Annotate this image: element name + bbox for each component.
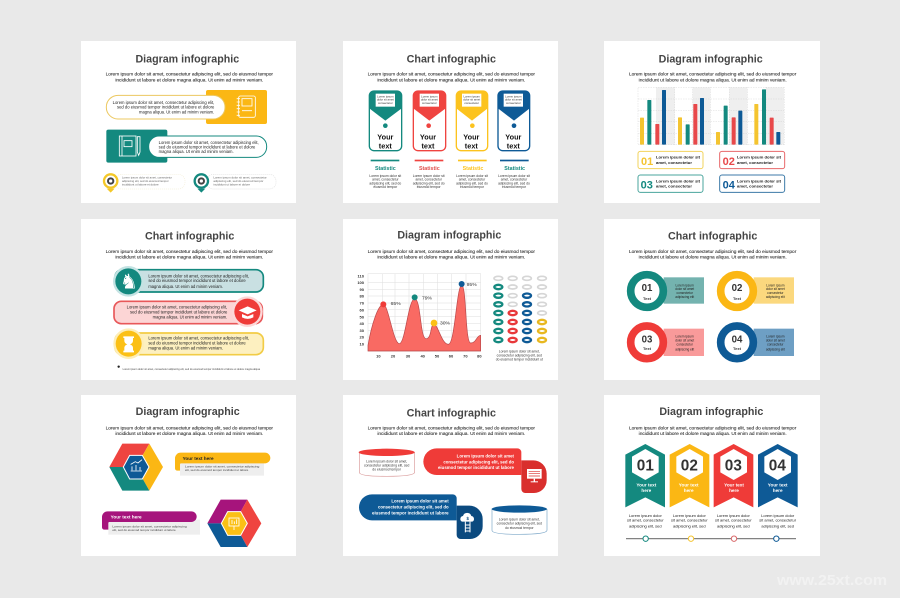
ring 03: dolor sit amet	[675, 338, 694, 342]
legend 03: 03	[641, 179, 653, 191]
ring 03: 03	[642, 334, 653, 345]
ring 04: consectetur	[767, 342, 783, 346]
area chart: 40	[420, 354, 426, 359]
banner 04: Lorem ipsum dolor	[761, 513, 795, 518]
callout: blue cloud: eiusmod tempor incididunt ut labore	[372, 510, 449, 515]
banner 01: 01	[637, 457, 654, 474]
legend 04: 04	[723, 179, 736, 191]
callout: red monitor: consectetur adipiscing elit, sed do	[443, 459, 514, 464]
legend 01: amet, consectetur	[656, 160, 692, 165]
hexagon: presentation	[207, 500, 261, 547]
banner 03: Lorem ipsum dolor	[717, 513, 751, 518]
pin: teal gear: adipiscing elit, sed do eiusmod tempor	[213, 179, 263, 183]
pin: yellow gear: incididunt ut labore et dolore	[122, 182, 159, 186]
intro text	[629, 426, 797, 437]
banner 02: 02	[681, 457, 698, 474]
card: yellow statistic: consectetur	[464, 101, 479, 105]
intro text: incididunt ut labore et dolore magna aliqua. Ut enim ad minim veniam.	[377, 431, 525, 437]
card: red statistic: amet, consectetur	[415, 178, 443, 182]
banner 02: here	[684, 488, 694, 493]
row: red education	[114, 296, 263, 327]
banner 01: Your text	[636, 482, 657, 487]
card: teal statistic	[369, 91, 402, 189]
callout: red monitor: eiusmod tempor incididunt ut labore	[438, 465, 515, 470]
heading: Diagram infographic	[659, 406, 763, 418]
area chart: 70	[360, 301, 365, 306]
ring 04	[721, 326, 794, 359]
callout: blue cloud	[359, 494, 483, 539]
area chart	[357, 273, 482, 359]
footnote: Lorem ipsum dolor sit amet, consectetur adipiscing elit, sed do eiusmod tempor incididunt ut labore et dolore magna aliqua	[123, 367, 260, 371]
heading: Chart infographic	[145, 231, 234, 243]
callout: purple text: Lorem ipsum dolor sit amet, consectetur adipiscing	[112, 525, 187, 529]
bar chart	[638, 87, 785, 145]
callout: teal notebook: sed do eiusmod tempor incididunt ut labore et dolore	[159, 145, 256, 150]
cylinder: red	[359, 449, 415, 476]
callout: yellow notebook: sed do eiusmod tempor incididunt ut labore et dolore	[117, 105, 215, 110]
legend 03	[638, 175, 703, 192]
legend 02: Lorem ipsum dolor sit	[737, 155, 782, 160]
row: yellow hourglass: Lorem ipsum dolor sit amet, consectetur adipiscing elit,	[148, 336, 249, 341]
ring 02	[721, 275, 794, 307]
ring 04: Text	[733, 346, 742, 351]
banner 02: sit amet, consectetur	[671, 518, 708, 523]
intro text: Lorem ipsum dolor sit amet, consectetur adipiscing elit, sed do eiusmod tempor	[629, 72, 797, 78]
ring 01: adipiscing elit	[675, 295, 694, 299]
legend 01: Lorem ipsum dolor sit	[656, 155, 701, 160]
legend 02: 02	[723, 156, 735, 168]
ring 04: Lorem ipsum	[766, 335, 785, 339]
pin: teal gear	[195, 174, 276, 193]
card: blue statistic: Statistic	[504, 166, 525, 172]
row: yellow hourglass	[113, 328, 263, 359]
card: teal statistic: adipiscing elit, sed do	[369, 181, 401, 185]
pin: yellow gear	[104, 174, 185, 193]
card: blue statistic: eiusmod tempor	[502, 185, 527, 189]
heading: Diagram infographic	[659, 54, 763, 66]
ring 02: Text	[733, 296, 742, 301]
ring 02: dolor sit amet	[766, 287, 785, 291]
card: red statistic: dolor sit amet	[421, 98, 438, 102]
row: red education: Lorem ipsum dolor sit amet, consectetur adipiscing elit,	[127, 305, 227, 310]
ring 01: 01	[642, 283, 653, 294]
panel: diagram infographic area chart	[343, 219, 558, 380]
legend 01: 01	[641, 156, 653, 168]
pictogram note: consectetur adipiscing elit, sed	[497, 354, 542, 358]
legend 02: amet, consectetur	[737, 160, 773, 165]
card: red statistic	[413, 91, 446, 189]
ring 03	[631, 326, 704, 359]
pin: teal gear: incididunt ut labore et dolore	[213, 182, 250, 186]
area chart: 20	[360, 335, 365, 340]
banner 03: 03	[725, 457, 742, 474]
area chart: 90	[360, 287, 365, 292]
intro text: incididunt ut labore et dolore magna aliqua. Ut enim ad minim veniam.	[377, 77, 525, 83]
intro text: Lorem ipsum dolor sit amet, consectetur adipiscing elit, sed do eiusmod tempor	[629, 426, 797, 432]
heading: Diagram infographic	[135, 54, 239, 66]
panel: diagram infographic hexagons	[81, 395, 296, 556]
panel: diagram infographic bar chart	[604, 41, 820, 203]
callout: red monitor	[423, 448, 547, 493]
card: red statistic: Lorem ipsum dolor sit	[413, 174, 445, 178]
card: yellow statistic: Lorem ipsum	[463, 94, 480, 98]
callout: blue cloud: consectetur adipiscing elit, sed do	[378, 505, 449, 510]
row: yellow hourglass: magna aliqua. Ut enim ad minim veniam.	[148, 346, 223, 351]
callout: yellow text: elit, sed do eiusmod tempor incididunt ut labore	[185, 468, 249, 472]
banner 03: sit amet, consectetur	[715, 518, 752, 523]
card: red statistic: Your	[420, 133, 436, 142]
cylinder: blue: do eiusmod tempor	[505, 526, 534, 530]
ring 04: 04	[732, 334, 743, 345]
panel: chart infographic rows	[81, 219, 296, 380]
area chart: 70	[463, 354, 468, 359]
area chart: 79%	[422, 295, 433, 301]
ring 02: 02	[732, 283, 742, 294]
card: blue statistic: consectetur	[506, 101, 521, 105]
area chart: 30	[360, 328, 365, 333]
intro text: Lorem ipsum dolor sit amet, consectetur adipiscing elit, sed do eiusmod tempor	[106, 249, 273, 255]
legend 01	[638, 151, 703, 169]
banner 02: adipiscing elit, sed	[673, 523, 706, 528]
intro text: Lorem ipsum dolor sit amet, consectetur adipiscing elit, sed do eiusmod tempor	[106, 72, 273, 78]
callout: yellow text	[175, 453, 270, 476]
cylinder: blue: Lorem ipsum dolor sit amet,	[499, 518, 540, 522]
hexagon: chart	[109, 444, 163, 491]
ring 02: consectetur	[767, 291, 783, 295]
callout: purple text	[102, 511, 200, 535]
intro text	[368, 249, 535, 260]
intro text	[368, 72, 535, 83]
area chart: 100	[357, 280, 365, 285]
callout: red monitor: Lorem ipsum dolor sit amet	[457, 454, 515, 459]
banner 02	[670, 444, 709, 528]
card: teal statistic: Lorem ipsum	[377, 94, 394, 98]
banner 02: Lorem ipsum dolor	[673, 513, 707, 518]
watermark: www.25xt.com	[776, 572, 887, 589]
ring 03: Lorem ipsum	[676, 335, 694, 339]
intro text	[106, 426, 273, 437]
callout: yellow notebook: magna aliqua. Ut enim ad minim veniam.	[139, 110, 214, 115]
legend 03: Lorem ipsum dolor sit	[656, 179, 701, 184]
card: blue statistic: Lorem ipsum dolor sit	[498, 174, 530, 178]
intro text: incididunt ut labore et dolore magna aliqua. Ut enim ad minim veniam.	[639, 431, 787, 437]
banner 01: adipiscing elit, sed	[629, 523, 662, 528]
banner 01: here	[641, 488, 652, 493]
ring 01	[631, 275, 704, 307]
ring 04: adipiscing elit	[766, 347, 785, 351]
intro text: incididunt ut labore et dolore magna aliqua. Ut enim ad minim veniam.	[639, 77, 787, 83]
banner 03: Your text	[724, 482, 744, 487]
intro text	[106, 249, 273, 260]
card: red statistic: Lorem ipsum	[421, 94, 438, 98]
intro text	[106, 72, 273, 83]
intro text: Lorem ipsum dolor sit amet, consectetur adipiscing elit, sed do eiusmod tempor	[629, 249, 797, 255]
card: blue statistic: dolor sit amet	[505, 98, 522, 102]
panel: diagram infographic notebooks	[81, 41, 296, 203]
heading: Chart infographic	[407, 408, 496, 420]
pictogram note: Lorem ipsum dolor sit amet,	[499, 350, 540, 354]
area chart: 30	[406, 354, 411, 359]
card: teal statistic: eiusmod tempor	[373, 185, 398, 189]
banner 04	[758, 444, 798, 528]
card: teal statistic: text	[379, 141, 392, 150]
pin: yellow gear: adipiscing elit, sed do eiusmod tempor	[122, 179, 169, 183]
banner 04: 04	[769, 457, 786, 474]
card: red statistic: eiusmod tempor	[417, 185, 441, 189]
pictogram note: do eiusmod tempor incididunt ut	[496, 358, 543, 362]
ring 01: consectetur	[677, 291, 693, 295]
callout: yellow text: Your text here	[183, 456, 214, 461]
intro text: Lorem ipsum dolor sit amet, consectetur adipiscing elit, sed do eiusmod tempor	[106, 426, 273, 432]
banner 03: here	[729, 488, 739, 493]
callout: purple text: Your text here	[111, 515, 142, 520]
callout: teal notebook: magna aliqua. Ut enim ad minim veniam.	[159, 149, 234, 154]
row: teal strategy	[113, 266, 263, 297]
panel: chart infographic rings	[604, 219, 820, 380]
cylinder: red: Lorem ipsum dolor sit amet,	[366, 460, 407, 464]
cylinder: blue	[492, 505, 547, 534]
banner 02: Your text	[679, 482, 699, 487]
intro text	[629, 72, 797, 83]
ring 01: dolor sit amet	[675, 287, 694, 291]
banner 01	[625, 444, 665, 528]
intro text	[629, 249, 797, 260]
panel: chart infographic cylinders	[343, 395, 558, 556]
panel: chart infographic cards	[343, 41, 558, 203]
area chart: 60	[449, 354, 454, 359]
banner 04: Your text	[768, 482, 788, 487]
card: yellow statistic: eiusmod tempor	[460, 185, 485, 189]
ring 03: Text	[643, 346, 652, 351]
card: yellow statistic: Your	[463, 133, 480, 142]
banner 03	[714, 444, 753, 528]
card: yellow statistic: Lorem ipsum dolor sit	[456, 174, 488, 178]
intro text	[368, 426, 535, 437]
banner 04: here	[773, 488, 783, 493]
area chart: 10	[376, 354, 381, 359]
legend 03: amet, consectetur	[656, 184, 692, 189]
ring 02: adipiscing elit	[766, 295, 785, 299]
banner 01: Lorem ipsum dolor	[629, 513, 663, 518]
area chart: 20	[391, 354, 396, 359]
callout: yellow notebook: Lorem ipsum dolor sit amet, consectetur adipiscing elit,	[113, 100, 214, 105]
banner 01: sit amet, consectetur	[627, 518, 664, 523]
heading: Chart infographic	[407, 54, 496, 66]
intro text: incididunt ut labore et dolore magna aliqua. Ut enim ad minim veniam.	[639, 254, 787, 260]
heading: Diagram infographic	[397, 229, 501, 241]
area chart: 60	[360, 307, 365, 312]
intro text: Lorem ipsum dolor sit amet, consectetur adipiscing elit, sed do eiusmod tempor	[368, 72, 535, 78]
intro text: incididunt ut labore et dolore magna aliqua. Ut enim ad minim veniam.	[115, 254, 263, 260]
callout: teal notebook	[106, 130, 267, 163]
card: teal statistic: amet, consectetur	[372, 178, 399, 182]
callout: yellow notebook	[106, 90, 267, 124]
row: teal strategy: sed do eiusmod tempor incididunt ut labore et dolore	[148, 278, 246, 283]
ring 04: dolor sit amet	[766, 338, 785, 342]
row: red education: magna aliqua. Ut enim ad minim veniam.	[153, 315, 227, 320]
area chart: 110	[358, 273, 365, 278]
ring 03: consectetur	[677, 342, 693, 346]
card: blue statistic: Your	[505, 133, 522, 142]
area chart: 40	[360, 321, 365, 326]
cylinder: blue: consectetur adipiscing elit, sed	[497, 522, 542, 526]
legend 02	[720, 151, 785, 169]
pictogram grid	[494, 276, 546, 342]
banner 04: adipiscing elit, sed	[761, 523, 794, 528]
area chart: 80	[360, 294, 365, 299]
card: yellow statistic: Statistic	[463, 166, 483, 172]
row: red education: sed do eiusmod tempor incididunt ut labore et dolore	[130, 309, 228, 314]
heading: Diagram infographic	[136, 406, 240, 418]
card: blue statistic: adipiscing elit, sed do	[498, 181, 530, 185]
card: blue statistic: text	[507, 141, 520, 150]
heading: Chart infographic	[668, 231, 757, 243]
card: yellow statistic: amet, consectetur	[459, 178, 486, 182]
card: teal statistic: Lorem ipsum dolor sit	[369, 174, 401, 178]
callout: blue cloud: $	[466, 516, 469, 521]
card: yellow statistic: adipiscing elit, sed do	[456, 181, 488, 185]
area chart: 10	[360, 341, 365, 346]
pictogram note	[496, 350, 543, 362]
legend 04: Lorem ipsum dolor sit	[737, 179, 782, 184]
banner 04: sit amet, consectetur	[759, 518, 797, 523]
banner 03: adipiscing elit, sed	[717, 523, 750, 528]
area chart: 80	[477, 354, 482, 359]
ring 02: Lorem ipsum	[766, 283, 785, 287]
row: teal strategy: magna aliqua. Ut enim ad minim veniam.	[148, 284, 223, 289]
card: teal statistic: dolor sit amet	[377, 98, 394, 102]
card: teal statistic: Statistic	[375, 166, 396, 172]
intro text: Lorem ipsum dolor sit amet, consectetur adipiscing elit, sed do eiusmod tempor	[368, 426, 535, 432]
ring 01: Text	[643, 296, 652, 301]
area chart: 30%	[440, 320, 451, 326]
intro text: incididunt ut labore et dolore magna aliqua. Ut enim ad minim veniam.	[377, 254, 525, 260]
row: yellow hourglass: sed do eiusmod tempor incididunt ut labore et dolore	[148, 341, 246, 346]
card: red statistic: Statistic	[419, 166, 440, 172]
pin: teal gear: Lorem ipsum dolor sit amet, consectetur	[213, 176, 267, 180]
callout: blue cloud: Lorem ipsum dolor sit amet	[391, 499, 449, 504]
legend 04	[720, 175, 785, 192]
card: red statistic: text	[421, 141, 435, 150]
cylinder: red: do eiusmod tempor	[372, 467, 402, 471]
ring 01: Lorem ipsum	[676, 283, 694, 287]
card: blue statistic: Lorem ipsum	[505, 94, 522, 98]
row: teal strategy: ♞	[120, 270, 138, 293]
timeline	[626, 536, 796, 541]
card: teal statistic: consectetur	[378, 101, 393, 105]
area chart: 65%	[391, 301, 401, 307]
ring 03: adipiscing elit	[675, 347, 694, 351]
intro text: incididunt ut labore et dolore magna aliqua. Ut enim ad minim veniam.	[115, 77, 263, 83]
intro text: incididunt ut labore et dolore magna aliqua. Ut enim ad minim veniam.	[115, 431, 263, 437]
row: teal strategy: Lorem ipsum dolor sit amet, consectetur adipiscing elit,	[148, 273, 249, 278]
intro text: Lorem ipsum dolor sit amet, consectetur adipiscing elit, sed do eiusmod tempor	[368, 249, 535, 255]
cylinder: red: consectetur adipiscing elit, sed	[364, 463, 409, 467]
callout: teal notebook: Lorem ipsum dolor sit amet, consectetur adipiscing elit,	[159, 140, 259, 145]
card: red statistic: consectetur	[422, 101, 437, 105]
card: teal statistic: Your	[377, 133, 394, 142]
area chart: 50	[360, 314, 365, 319]
pin: yellow gear: Lorem ipsum dolor sit amet, consectetur	[122, 176, 172, 180]
card: yellow statistic: text	[465, 141, 478, 150]
card: yellow statistic: dolor sit amet	[463, 98, 480, 102]
card: yellow statistic	[456, 91, 488, 189]
panel: diagram infographic banners	[604, 395, 820, 556]
legend 04: amet, consectetur	[737, 184, 773, 189]
card: blue statistic: amet, consectetur	[501, 178, 528, 182]
card: red statistic: adipiscing elit, sed do	[413, 181, 445, 185]
callout: yellow text: Lorem ipsum dolor sit amet, consectetur adipiscing	[185, 465, 260, 469]
area chart: 95%	[467, 282, 477, 288]
callout: purple text: elit, sed do eiusmod tempor incididunt ut labore	[112, 528, 176, 532]
area chart: 50	[435, 354, 440, 359]
card: blue statistic	[498, 91, 530, 189]
